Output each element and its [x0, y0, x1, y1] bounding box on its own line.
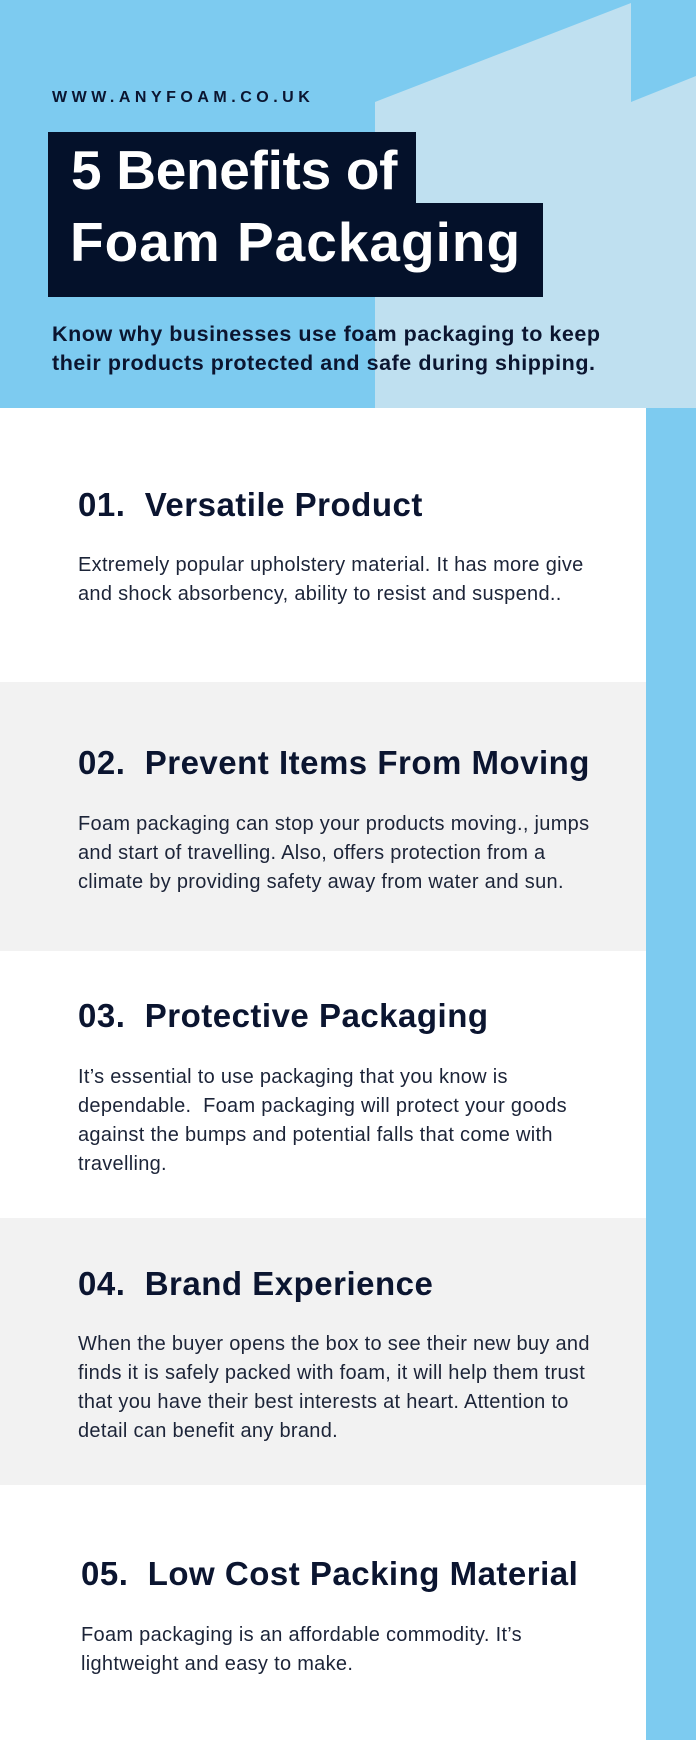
panel: 05: 05. Low Cost Packing Material [81, 1555, 578, 1592]
panel: 03 [78, 997, 567, 1175]
panel: 05: lightweight and easy to make. [81, 1653, 353, 1675]
panel: 01: Extremely popular upholstery material. It has more give [78, 554, 584, 576]
panel: 02: climate by providing safety away from water and sun. [78, 871, 564, 893]
panel: 02: and start of travelling. Also, offers protection from a [78, 842, 545, 864]
panel: 05 [81, 1555, 578, 1675]
subtitle: their products protected and safe during shipping. [52, 351, 596, 375]
panel: 02: Foam packaging can stop your products moving., jumps [78, 813, 589, 835]
panel: 01 [78, 486, 584, 605]
header background [0, 0, 696, 408]
panel: 04: that you have their best interests at heart. Attention to [78, 1391, 569, 1413]
right blue strip [646, 408, 696, 1740]
panel: 04: finds it is safely packed with foam, it will help them trust [78, 1362, 585, 1384]
subtitle: Know why businesses use foam packaging to keep [52, 322, 601, 346]
title: 5 Benefits of [71, 139, 397, 201]
panel: 02 [0, 682, 646, 951]
subtitle [52, 322, 601, 375]
panel: 02: 02. Prevent Items From Moving [78, 744, 590, 781]
panel: 03: travelling. [78, 1153, 167, 1175]
panel: 04: When the buyer opens the box to see their new buy and [78, 1333, 590, 1355]
panel: 03: dependable. Foam packaging will protect your goods [78, 1095, 567, 1117]
title: Foam Packaging [70, 211, 521, 273]
panel: 03: It’s essential to use packaging that you know is [78, 1066, 508, 1088]
panel: 05: Foam packaging is an affordable commodity. It’s [81, 1624, 522, 1646]
website url: WWW.ANYFOAM.CO.UK [52, 89, 314, 106]
panel: 03: against the bumps and potential falls that come with [78, 1124, 553, 1146]
panel: 04: detail can benefit any brand. [78, 1420, 338, 1442]
panel: 01: 01. Versatile Product [78, 486, 423, 523]
panel: 01: and shock absorbency, ability to resist and suspend.. [78, 583, 562, 605]
panel: 03: 03. Protective Packaging [78, 997, 489, 1034]
panel: 04 [0, 1218, 646, 1485]
title [48, 132, 543, 297]
panel: 04: 04. Brand Experience [78, 1265, 433, 1302]
